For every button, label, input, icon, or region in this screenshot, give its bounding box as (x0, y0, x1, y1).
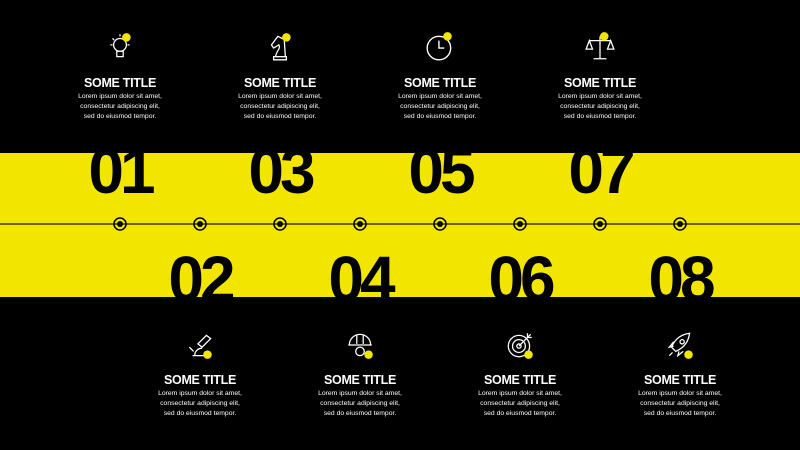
item 08 text: Lorem ipsum dolor sit amet, (638, 390, 722, 397)
item 05 text: sed do eiusmod tempor. (404, 113, 476, 120)
icon: microscope (188, 334, 212, 359)
item 07 text: Lorem ipsum dolor sit amet, (558, 93, 642, 100)
icon: light bulb (110, 33, 131, 58)
item 05 text: consectetur adipiscing elit, (400, 103, 480, 110)
icon: chess knight (270, 33, 291, 60)
item 05 text: SOME TITLE (404, 76, 476, 90)
item 04 text: Lorem ipsum dolor sit amet, (318, 390, 402, 397)
item 08 text: sed do eiusmod tempor. (644, 410, 716, 417)
item 01 text: consectetur adipiscing elit, (80, 103, 160, 110)
item 02 text: Lorem ipsum dolor sit amet, (158, 390, 242, 397)
item 01 text (78, 76, 162, 120)
item 05 text (398, 76, 482, 120)
item 03 text: SOME TITLE (244, 76, 316, 90)
item 06 text: sed do eiusmod tempor. (484, 410, 556, 417)
item 03 text: sed do eiusmod tempor. (244, 113, 316, 120)
item 06 text (478, 373, 562, 417)
timeline line (0, 223, 800, 225)
item 02 text: consectetur adipiscing elit, (160, 400, 240, 407)
item 08 text (638, 373, 722, 417)
icon: target (508, 333, 533, 359)
icon: scales (585, 32, 615, 60)
icon: rocket (668, 332, 693, 359)
item 04 text: SOME TITLE (324, 373, 396, 387)
item 05 text: Lorem ipsum dolor sit amet, (398, 93, 482, 100)
item 08 text: consectetur adipiscing elit, (640, 400, 720, 407)
yellow band (0, 153, 800, 297)
timeline markers (113, 217, 687, 231)
item 06 text: SOME TITLE (484, 373, 556, 387)
item 01 text: sed do eiusmod tempor. (84, 113, 156, 120)
item 01 text: Lorem ipsum dolor sit amet, (78, 93, 162, 100)
item 07 text: sed do eiusmod tempor. (564, 113, 636, 120)
icon: clock (426, 32, 452, 60)
item 06 text: consectetur adipiscing elit, (480, 400, 560, 407)
item 03 text: consectetur adipiscing elit, (240, 103, 320, 110)
item 03 text: Lorem ipsum dolor sit amet, (238, 93, 322, 100)
item 02 text: SOME TITLE (164, 373, 236, 387)
item 08 text: SOME TITLE (644, 373, 716, 387)
item 02 text: sed do eiusmod tempor. (164, 410, 236, 417)
item 04 text: sed do eiusmod tempor. (324, 410, 396, 417)
item 07 text: consectetur adipiscing elit, (560, 103, 640, 110)
icon: helmet gear (348, 334, 373, 359)
item 07 text (558, 76, 642, 120)
item 03 text (238, 76, 322, 120)
item 07 text: SOME TITLE (564, 76, 636, 90)
item 04 text: consectetur adipiscing elit, (320, 400, 400, 407)
item 06 text: Lorem ipsum dolor sit amet, (478, 390, 562, 397)
item 02 text (158, 373, 242, 417)
item 04 text (318, 373, 402, 417)
item 01 text: SOME TITLE (84, 76, 156, 90)
